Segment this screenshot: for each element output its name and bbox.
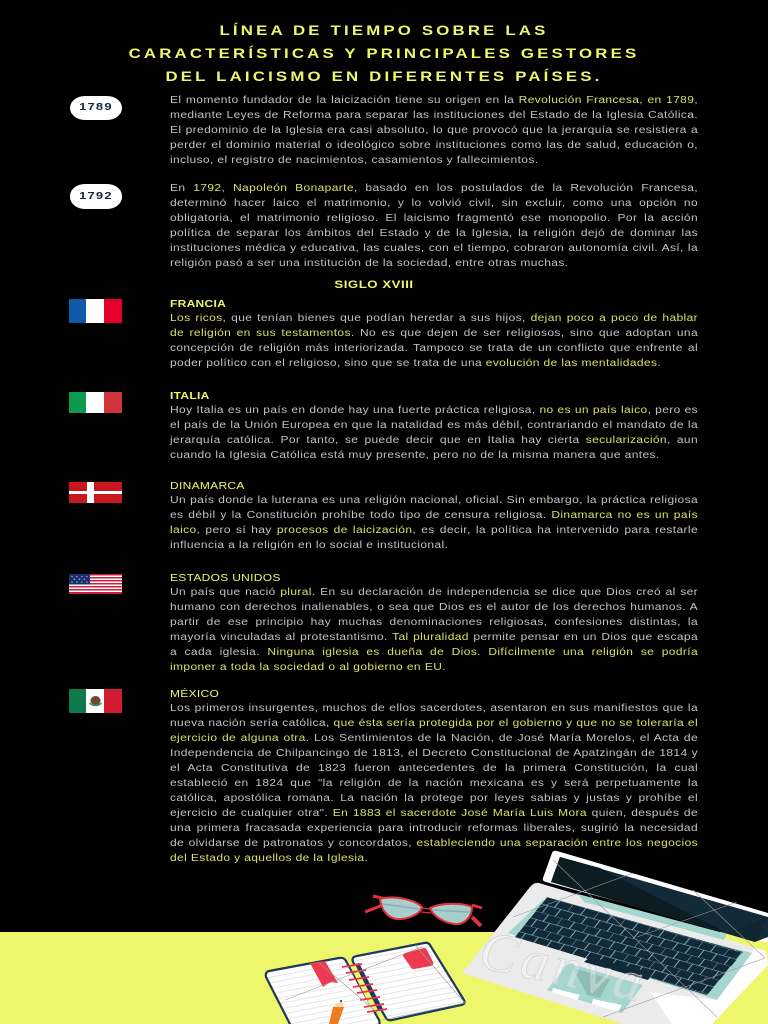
illustration: desk scene [0, 850, 768, 1024]
heading: siglo XVIII: SIGLO XVIII [334, 279, 413, 291]
panel: Dinamarca [170, 481, 698, 551]
text block: 1789: mediante Leyes de Reforma para separar las instituciones del Estado de la Iglesia Católica. [170, 110, 698, 121]
year badge: 1792: 1792 [79, 190, 113, 202]
text block: 1792 [170, 183, 698, 269]
panel: México: estableció en 1824 que "la religión de la nación mexicana es y será perpetuamente la [170, 778, 698, 789]
panel: Francia: FRANCIA [170, 299, 226, 310]
panel: Italia: jerarquía católica. Por tanto, se puede decir que en Italia hay cierta secularización, aun [170, 435, 698, 446]
panel: Francia [170, 299, 698, 369]
panel: México: Independencia de Chilpancingo de 1813, el Decreto Constitucional de Apatzingán de 1814 y [170, 748, 698, 759]
panel: Estados Unidos: mayoría vinculadas al protestantismo. Tal pluralidad permite pensar en un Dios que escapa [170, 632, 698, 643]
title [129, 22, 639, 84]
bookmark [310, 961, 338, 987]
year badge: 1792 [70, 184, 122, 208]
icon: flag of Mexico [69, 689, 122, 713]
panel: México: Los primeros insurgentes, muchos de ellos sacerdotes, asentaron en sus manifiestos que la [170, 703, 698, 714]
panel: Estados Unidos [170, 573, 698, 673]
text block: 1789: incluso, el registro de nacimientos, casamientos y fallecimientos. [170, 155, 538, 166]
watermark: Canva: Canva [474, 919, 649, 1014]
panel: México: nueva nación sería católica, que ésta sería protegida por el gobierno y que no se toleraría el [170, 718, 698, 729]
panel: México: MÉXICO [170, 689, 219, 700]
panel: Estados Unidos: a cada iglesia. Ninguna iglesia es dueña de Dios. Difícilmente una religión se podría [170, 647, 698, 658]
panel: México: católica, apostólica romana. La nación la protege por leyes sabias y justas y prohíbe el [170, 793, 698, 804]
title: LÍNEA DE TIEMPO SOBRE LAS [219, 22, 549, 38]
text block: 1789: El predominio de la Iglesia era casi absoluto, lo que provocó que la jerarquía se resistiera a [170, 125, 698, 136]
icon: flag of the United States [69, 574, 122, 594]
icon: laptop [462, 851, 768, 1024]
text block: 1792: determinó hacer laico el matrimonio, y lo volvió civil, sin excluir, como una opción no [170, 198, 698, 209]
year badge: 1789 [70, 96, 122, 120]
text block: 1792: obligatoria, el matrimonio religioso. El laicismo fragmentó ese monopolio. Por la acción [170, 213, 698, 224]
panel: Italia: cuando la Iglesia Católica está muy presente, pero no de la misma manera que antes. [170, 450, 660, 461]
panel: Dinamarca: influencia a la religión en lo social e institucional. [170, 540, 448, 551]
panel: México [170, 688, 698, 864]
keyboard deck [508, 900, 752, 1000]
panel: Francia: concepción de religión más interiorizada. Tampoco se trata de un conflicto que enfrente al [170, 343, 698, 354]
watermark lines [285, 860, 765, 1020]
text block: 1789: El momento fundador de la laicización tiene su origen en la Revolución Francesa, en 1789, [170, 95, 698, 106]
icon: glasses [365, 896, 482, 926]
text block: 1792: religión pasó a ser una institución de la sociedad, entre otras muchas. [170, 258, 568, 269]
panel: Estados Unidos: humano con derechos inalienables, o sea que Dios es el autor de los derechos humanos. A [170, 602, 698, 613]
panel: México: una primera fracasada experiencia para introducir reformas liberales, sugirió la necesidad [170, 823, 698, 834]
panel: Dinamarca: Un país donde la luterana es una religión nacional, oficial. Sin embargo, la práctica religiosa [170, 495, 698, 506]
icon: flag of Italy [69, 392, 122, 413]
laptop screen [543, 851, 768, 942]
red note [403, 948, 433, 969]
panel: Estados Unidos: partir de ese principio hay muchas denominaciones religiosas, confesiones distintas, la [170, 617, 698, 628]
space bar [584, 957, 653, 980]
panel: Dinamarca: es débil y la Constitución prohíbe todo tipo de censura religiosa. Dinamarca no es un país [170, 510, 698, 521]
panel: Italia [170, 391, 698, 461]
desk surface [0, 932, 768, 1024]
hinge strip [578, 894, 727, 940]
title: CARACTERÍSTICAS Y PRINCIPALES GESTORES [129, 45, 639, 61]
panel: Francia: poder político con el religioso, sino que se trata de una evolución de las mentalidades. [170, 358, 661, 369]
panel: Dinamarca: DINAMARCA [170, 481, 245, 492]
trackpad [547, 963, 643, 1013]
keyboard keys [515, 897, 743, 995]
panel: Estados Unidos: imponer a toda la sociedad o al gobierno en EU. [170, 662, 446, 673]
panel: Italia: Hoy Italia es un país en donde hay una fuerte práctica religiosa, no es un país laico, pero es [170, 405, 698, 416]
pencil [329, 1007, 344, 1024]
spiral [350, 964, 378, 1012]
panel: Dinamarca: laico, pero sí hay procesos de laicización, es decir, la política ha intervenido para restarle [170, 525, 698, 536]
panel: Estados Unidos: Un país que nació plural. En su declaración de independencia se dice que Dios creó al ser [170, 587, 698, 598]
year badge: 1789: 1789 [79, 102, 113, 113]
panel: México: de olvidarse de patronatos y concordatos, estableciendo una separación entre los negocios [170, 838, 698, 849]
panel: México: del Estado y aquellos de la Iglesia. [170, 853, 368, 864]
panel: Francia: de religión en sus testamentos. No es que dejen de ser religiosos, sino que adoptan una [170, 328, 698, 339]
text block: 1792: política de separar los ámbitos del Estado y de la Iglesia, la religión dejó de dominar las [170, 228, 698, 239]
title: DEL LAICISMO EN DIFERENTES PAÍSES. [165, 68, 603, 84]
text block: 1792: En 1792, Napoleón Bonaparte, basado en los postulados de la Revolución Francesa, [170, 183, 698, 194]
panel: Francia: Los ricos, que tenían bienes que podían heredar a sus hijos, dejan poco a poco de hablar [170, 313, 698, 324]
text block: 1792: instituciones médica y educativa, las cuales, con el tiempo, cobraron autonomía civil. Así, la [170, 243, 698, 254]
panel: Estados Unidos: ESTADOS UNIDOS [170, 573, 281, 584]
panel: México: ejercicio de alguna otra. Los Sentimientos de la Nación, de José María Morelos, el Acta de [170, 733, 698, 744]
icon: flag of Denmark [69, 482, 122, 503]
icon: notebook with pencil [266, 943, 465, 1024]
panel: Italia: el país de la Unión Europea en que la natalidad es más débil, contrariando el mandato de la [170, 420, 698, 431]
text block: 1789 [170, 95, 698, 166]
laptop base [462, 883, 768, 1024]
panel: México: el Acta Constitutiva de 1823 fueron antecedentes de la primera Constitución, la cual [170, 763, 698, 774]
panel: México: ejercicio de cualquier otra". En 1883 el sacerdote José María Luis Mora quien, después de [170, 808, 698, 819]
panel: Italia: ITALIA [170, 391, 210, 402]
icon: flag of France [69, 299, 122, 323]
text block: 1789: perder el dominio material o ideológico sobre instituciones como las de salud, educación o, [170, 140, 698, 151]
